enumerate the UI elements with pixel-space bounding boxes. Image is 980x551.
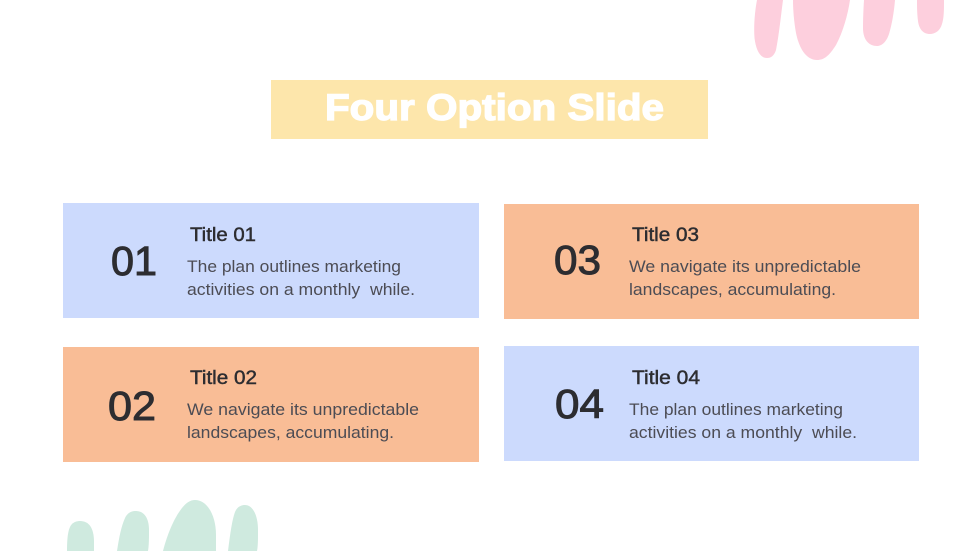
text: description 04: The plan outlines marketing bbox=[629, 400, 843, 419]
title bbox=[271, 80, 708, 139]
text: description 02: landscapes, accumulating. bbox=[187, 423, 394, 442]
panel: option 04 bbox=[504, 346, 919, 461]
number 02: 02 bbox=[108, 383, 156, 429]
text: description 03: We navigate its unpredictable bbox=[629, 257, 861, 276]
panel: option 02 bbox=[63, 347, 479, 462]
text: description 01: activities on a monthly while. bbox=[187, 280, 415, 299]
heading: Title 02: Title 02 bbox=[190, 368, 257, 389]
heading: Title 03: Title 03 bbox=[632, 225, 699, 246]
decoration: pink brush strokes bbox=[754, 0, 944, 60]
heading: Title 04: Title 04 bbox=[632, 368, 700, 389]
panel: option 01 bbox=[63, 203, 479, 318]
heading: Title 01: Title 01 bbox=[190, 225, 256, 246]
text: description 03: landscapes, accumulating. bbox=[629, 280, 836, 299]
number 04: 04 bbox=[555, 381, 604, 427]
title: Four Option Slide bbox=[325, 87, 664, 128]
text: description 01: The plan outlines marketing bbox=[187, 257, 401, 276]
number 03: 03 bbox=[554, 237, 601, 283]
text: description 04: activities on a monthly while. bbox=[629, 423, 857, 442]
number 01: 01 bbox=[111, 238, 157, 284]
decoration: green brush strokes bbox=[67, 500, 258, 551]
text: description 02: We navigate its unpredictable bbox=[187, 400, 419, 419]
panel: option 03 bbox=[504, 204, 919, 319]
